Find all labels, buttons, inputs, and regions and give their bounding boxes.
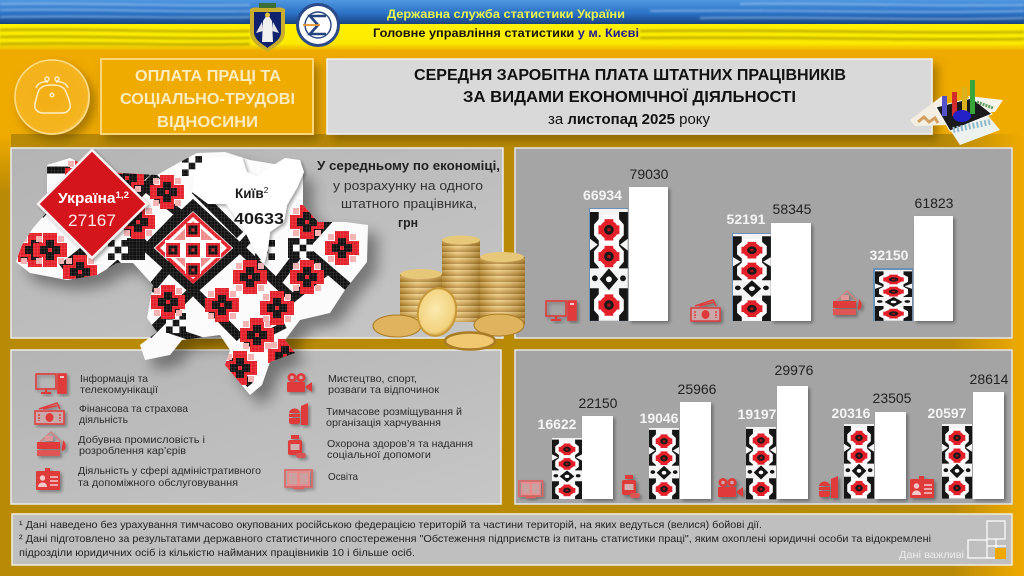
icon: Kyiv coat of arms (250, 3, 285, 52)
text: average by economy: грн (398, 215, 418, 230)
map: embroidered Ukraine (16, 152, 368, 395)
legend: left column: та допоміжного обслуговування (78, 477, 238, 489)
section heading box: ВІДНОСИНИ (157, 114, 258, 131)
icon: statistics service sigma logo (296, 3, 340, 47)
group: mining: 61823 (915, 195, 954, 211)
group: accommodation and food: 20316 (832, 405, 871, 421)
legend: right column: організація харчування (326, 417, 441, 429)
panel: footnotes: ² Дані підготовлено за результатами державного статистичного спостереження "Обстеження підприємств із питань статистики праці", яким охоплені юридичні особи та відокремлені (19, 533, 931, 545)
legend: left column: Інформація та (80, 373, 148, 385)
legend: right column: Освіта (328, 471, 358, 483)
group: information and telecom: 66934 (583, 187, 622, 203)
group: accommodation and food (819, 390, 912, 499)
group: health care: 25966 (678, 381, 717, 397)
panel: Ukraine map summary (11, 148, 503, 338)
title panel (327, 59, 932, 134)
group: health care (622, 381, 717, 499)
section heading box: СОЦІАЛЬНО-ТРУДОВІ (120, 91, 295, 108)
callout: Ukraine average: 1,2 (116, 190, 129, 200)
legend: right column: Тимчасове розміщування й (326, 406, 462, 418)
group: finance and insurance (691, 201, 812, 321)
legend: left column: діяльність (79, 414, 129, 426)
panel: footnotes (12, 514, 1012, 565)
group: administrative services (910, 371, 1009, 499)
panel: legend (11, 350, 501, 504)
callout: Ukraine average (38, 150, 147, 258)
section heading box: ОПЛАТА ПРАЦІ ТА (135, 68, 281, 85)
group: mining: 32150 (870, 247, 909, 263)
group: education: 16622 (538, 416, 577, 432)
legend: left column: Діяльність у сфері адміністративного (78, 465, 261, 477)
header text: Головне управління статистики у м. Києві (373, 26, 639, 40)
badge: important data (899, 521, 1006, 561)
group: information and telecom (546, 166, 669, 321)
badge: important data: Дані важливі (899, 549, 964, 561)
map: Kyiv region (192, 156, 304, 264)
group: information and telecom: 79030 (630, 166, 669, 182)
group: administrative services: 28614 (970, 371, 1009, 387)
map: Kyiv region: 40633 (234, 211, 284, 228)
group: administrative services: 20597 (928, 405, 967, 421)
legend: right column: розваги та відпочинок (328, 384, 439, 396)
group: arts and sport: 19197 (738, 406, 777, 422)
panel: bottom chart (515, 350, 1012, 504)
group: finance and insurance: 58345 (773, 201, 812, 217)
panel: footnotes: ¹ Дані наведено без урахування тимчасово окупованих російською федерацією територій та частини територій, на яких ведуться (велися) бойові дії. (19, 519, 762, 531)
text: average by economy: у розрахунку на одного (333, 178, 483, 193)
group: arts and sport (718, 362, 814, 499)
icon: purse in circle (14, 59, 90, 135)
group: education (519, 395, 618, 499)
header text (373, 7, 639, 40)
map shadow (26, 162, 378, 405)
bar chart: top three industries (546, 166, 954, 321)
legend: left column: телекомунікації (80, 384, 158, 396)
group: education: 22150 (579, 395, 618, 411)
map: Kyiv region: 2 (264, 185, 269, 195)
bar chart: bottom five industries (519, 362, 1009, 499)
group: arts and sport: 29976 (775, 362, 814, 378)
legend: right column: соціальної допомоги (327, 449, 431, 461)
group: mining (833, 195, 954, 321)
text: average by economy (317, 158, 500, 230)
map: Kyiv region: Київ (235, 186, 264, 201)
legend: left column: розроблення кар’єрів (79, 445, 186, 457)
title panel: ЗА ВИДАМИ ЕКОНОМІЧНОЇ ДІЯЛЬНОСТІ (463, 88, 796, 106)
text: average by economy: У середньому по економіці, (317, 158, 500, 173)
legend: right column (285, 373, 473, 488)
group: accommodation and food: 23505 (873, 390, 912, 406)
group: health care: 19046 (640, 410, 679, 426)
legend: left column (35, 373, 261, 490)
callout: Ukraine average: 27167 (68, 211, 116, 230)
header band: Ukrainian flag ribbon (0, 0, 1024, 50)
group: finance and insurance: 52191 (727, 211, 766, 227)
legend: left column: Добувна промисловість і (78, 434, 205, 446)
title panel: СЕРЕДНЯ ЗАРОБІТНА ПЛАТА ШТАТНИХ ПРАЦІВНИКІВ (414, 67, 846, 84)
callout: Ukraine average: Україна (58, 191, 112, 207)
legend: left column: Фінансова та страхова (79, 403, 188, 415)
section heading box (101, 59, 313, 134)
header text: Державна служба статистики України (387, 7, 625, 21)
panel: footnotes: підрозділи юридичних осіб із кількістю найманих працівників 10 і більше осіб. (19, 547, 415, 559)
title panel: за листопад 2025 року (548, 112, 711, 128)
panel: top chart (515, 148, 1012, 338)
icon: charts on tablet (910, 80, 1003, 145)
legend: right column: Охорона здоров’я та надання (327, 438, 473, 450)
icon: gold coin stacks (373, 236, 525, 350)
legend: right column: Мистецтво, спорт, (328, 373, 417, 385)
text: average by economy: штатного працівника, (341, 196, 477, 211)
